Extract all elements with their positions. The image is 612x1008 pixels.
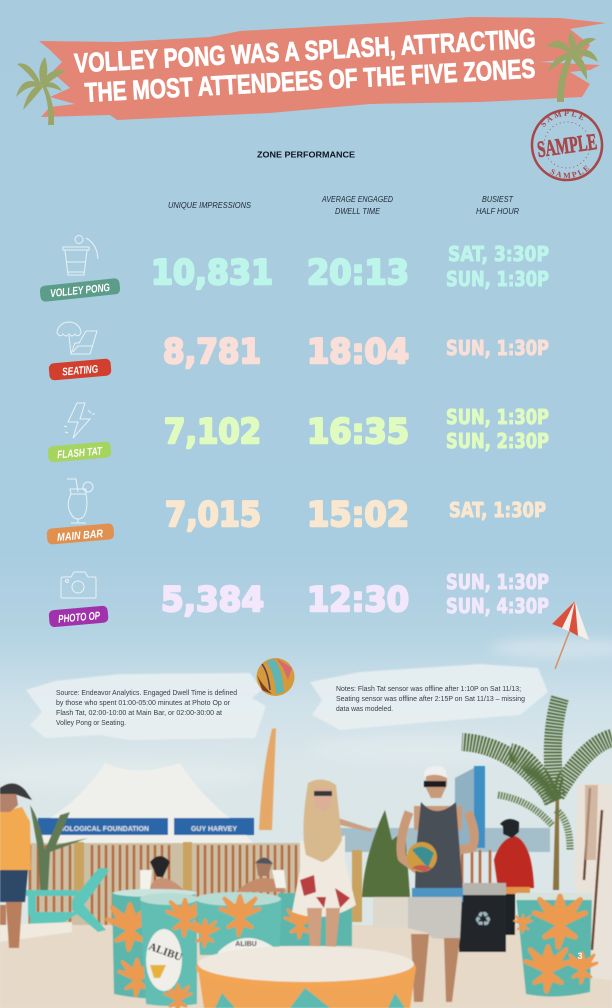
notes <box>310 664 548 730</box>
text: Volley Pong or Seating. <box>56 718 126 727</box>
column headers: HALF HOUR <box>476 206 519 216</box>
busiest half hour: SUN, 1:30P <box>446 336 549 360</box>
sample stamp <box>530 108 604 182</box>
column headers: DWELL TIME <box>335 206 380 216</box>
zone label: MAIN BAR <box>57 528 104 544</box>
zone label <box>49 606 108 626</box>
dwell time: 16:35 <box>307 412 409 452</box>
page number: 3 <box>577 951 583 961</box>
posts <box>74 842 362 922</box>
zone label <box>47 524 113 545</box>
sea horizon <box>340 828 550 852</box>
zone label: PHOTO OP <box>58 610 101 626</box>
busiest half hour: SUN, 1:30P <box>446 267 549 291</box>
impressions: 5,384 <box>161 580 264 620</box>
photo scene <box>0 698 612 1008</box>
dwell time: 15:02 <box>307 495 409 535</box>
icon: camera <box>61 572 96 598</box>
dwell time: 12:30 <box>307 580 409 620</box>
brush <box>26 673 266 740</box>
source note <box>26 673 266 740</box>
icon: beach umbrella <box>552 601 589 669</box>
brush <box>310 664 548 730</box>
sample stamp: SAMPLE <box>550 165 590 178</box>
row: seating <box>50 322 549 380</box>
teal barrels: ALIBU <box>235 941 257 948</box>
tent <box>38 763 255 845</box>
recycling bin: ♻ <box>474 907 492 931</box>
icon: cup and ball <box>63 236 98 275</box>
woman <box>292 779 372 947</box>
right palm tree <box>546 32 598 102</box>
headline <box>73 24 538 108</box>
fence <box>28 843 300 925</box>
left palm tree <box>16 57 66 125</box>
text: Seating sensor was offline after 2:15P on Sat 11/13 – missing <box>336 694 525 703</box>
banners: GUY HARVEY <box>191 826 237 833</box>
dwell time: 20:13 <box>307 253 409 293</box>
text <box>56 688 237 727</box>
zone label <box>49 442 111 462</box>
seated man <box>236 857 286 892</box>
row: photo op <box>49 570 549 626</box>
text <box>336 684 525 713</box>
large orange barrel <box>196 946 416 1008</box>
busiest half hour <box>446 242 549 291</box>
busiest half hour <box>446 405 549 453</box>
feather flag <box>259 728 276 830</box>
zone label: FLASH TAT <box>57 445 104 461</box>
busiest half hour <box>446 570 549 618</box>
man with ball <box>401 766 474 1002</box>
man in orange shirt <box>0 783 32 948</box>
seated woman <box>140 856 186 892</box>
zone label: SEATING <box>62 363 99 379</box>
blue sign <box>455 766 485 848</box>
malibu label: ALIBU <box>147 941 184 964</box>
clouds <box>0 638 612 791</box>
teal barrels <box>108 889 352 1008</box>
text: by those who spent 01:00-05:00 minutes at Photo Op or <box>56 698 230 707</box>
banners <box>38 818 254 835</box>
busiest half hour: SUN, 4:30P <box>446 594 549 618</box>
column headers: AVERAGE ENGAGED <box>321 194 393 204</box>
busiest half hour: SUN, 2:30P <box>446 429 549 453</box>
text: Notes: Flash Tat sensor was offline after 1:10P on Sat 11/13; <box>336 684 521 693</box>
section heading: ZONE PERFORMANCE <box>257 150 355 160</box>
impressions: 8,781 <box>163 332 261 372</box>
text: Source: Endeavor Analytics. Engaged Dwell Time is defined <box>56 688 237 697</box>
row: main bar <box>47 479 546 545</box>
banana plant <box>30 805 88 890</box>
row: volley pong <box>40 236 549 301</box>
right wall panels <box>574 784 612 980</box>
text: data was modeled. <box>336 704 393 713</box>
icon: lightning bolt <box>64 403 95 438</box>
palm tree right <box>462 698 612 890</box>
dwell time: 18:04 <box>307 332 409 372</box>
column headers <box>168 194 519 216</box>
sand <box>0 925 612 1008</box>
column headers: BUSIEST <box>482 194 514 204</box>
icon: umbrella and lounger <box>57 322 97 354</box>
row: flash tat <box>49 403 549 462</box>
planter and plants <box>362 810 410 927</box>
busiest half hour: SUN, 1:30P <box>446 405 549 429</box>
impressions: 7,102 <box>164 412 261 452</box>
text: Flash Tat, 02:00-10:00 at Main Bar, or 02:00-30:00 at <box>56 708 223 717</box>
icon: cocktail glass <box>67 479 93 523</box>
impressions: 7,015 <box>165 495 261 535</box>
banners: BIOLOGICAL FOUNDATION <box>57 826 149 833</box>
seated man in red <box>494 819 534 935</box>
impressions: 10,831 <box>151 253 273 293</box>
title banner <box>39 17 606 120</box>
volleyball <box>256 658 294 696</box>
zone label: VOLLEY PONG <box>50 282 111 300</box>
sample stamp: SAMPLE <box>541 111 584 127</box>
busiest half hour: SAT, 1:30P <box>449 498 546 522</box>
busiest half hour: SAT, 3:30P <box>448 242 549 266</box>
recycling bin <box>459 883 506 952</box>
right barrel <box>514 893 597 997</box>
busiest half hour: SUN, 1:30P <box>446 570 549 594</box>
malibu label <box>146 929 184 991</box>
zone label <box>50 359 111 380</box>
column headers: UNIQUE IMPRESSIONS <box>168 200 251 210</box>
lounge chair <box>25 868 109 932</box>
brush stroke <box>39 17 606 120</box>
